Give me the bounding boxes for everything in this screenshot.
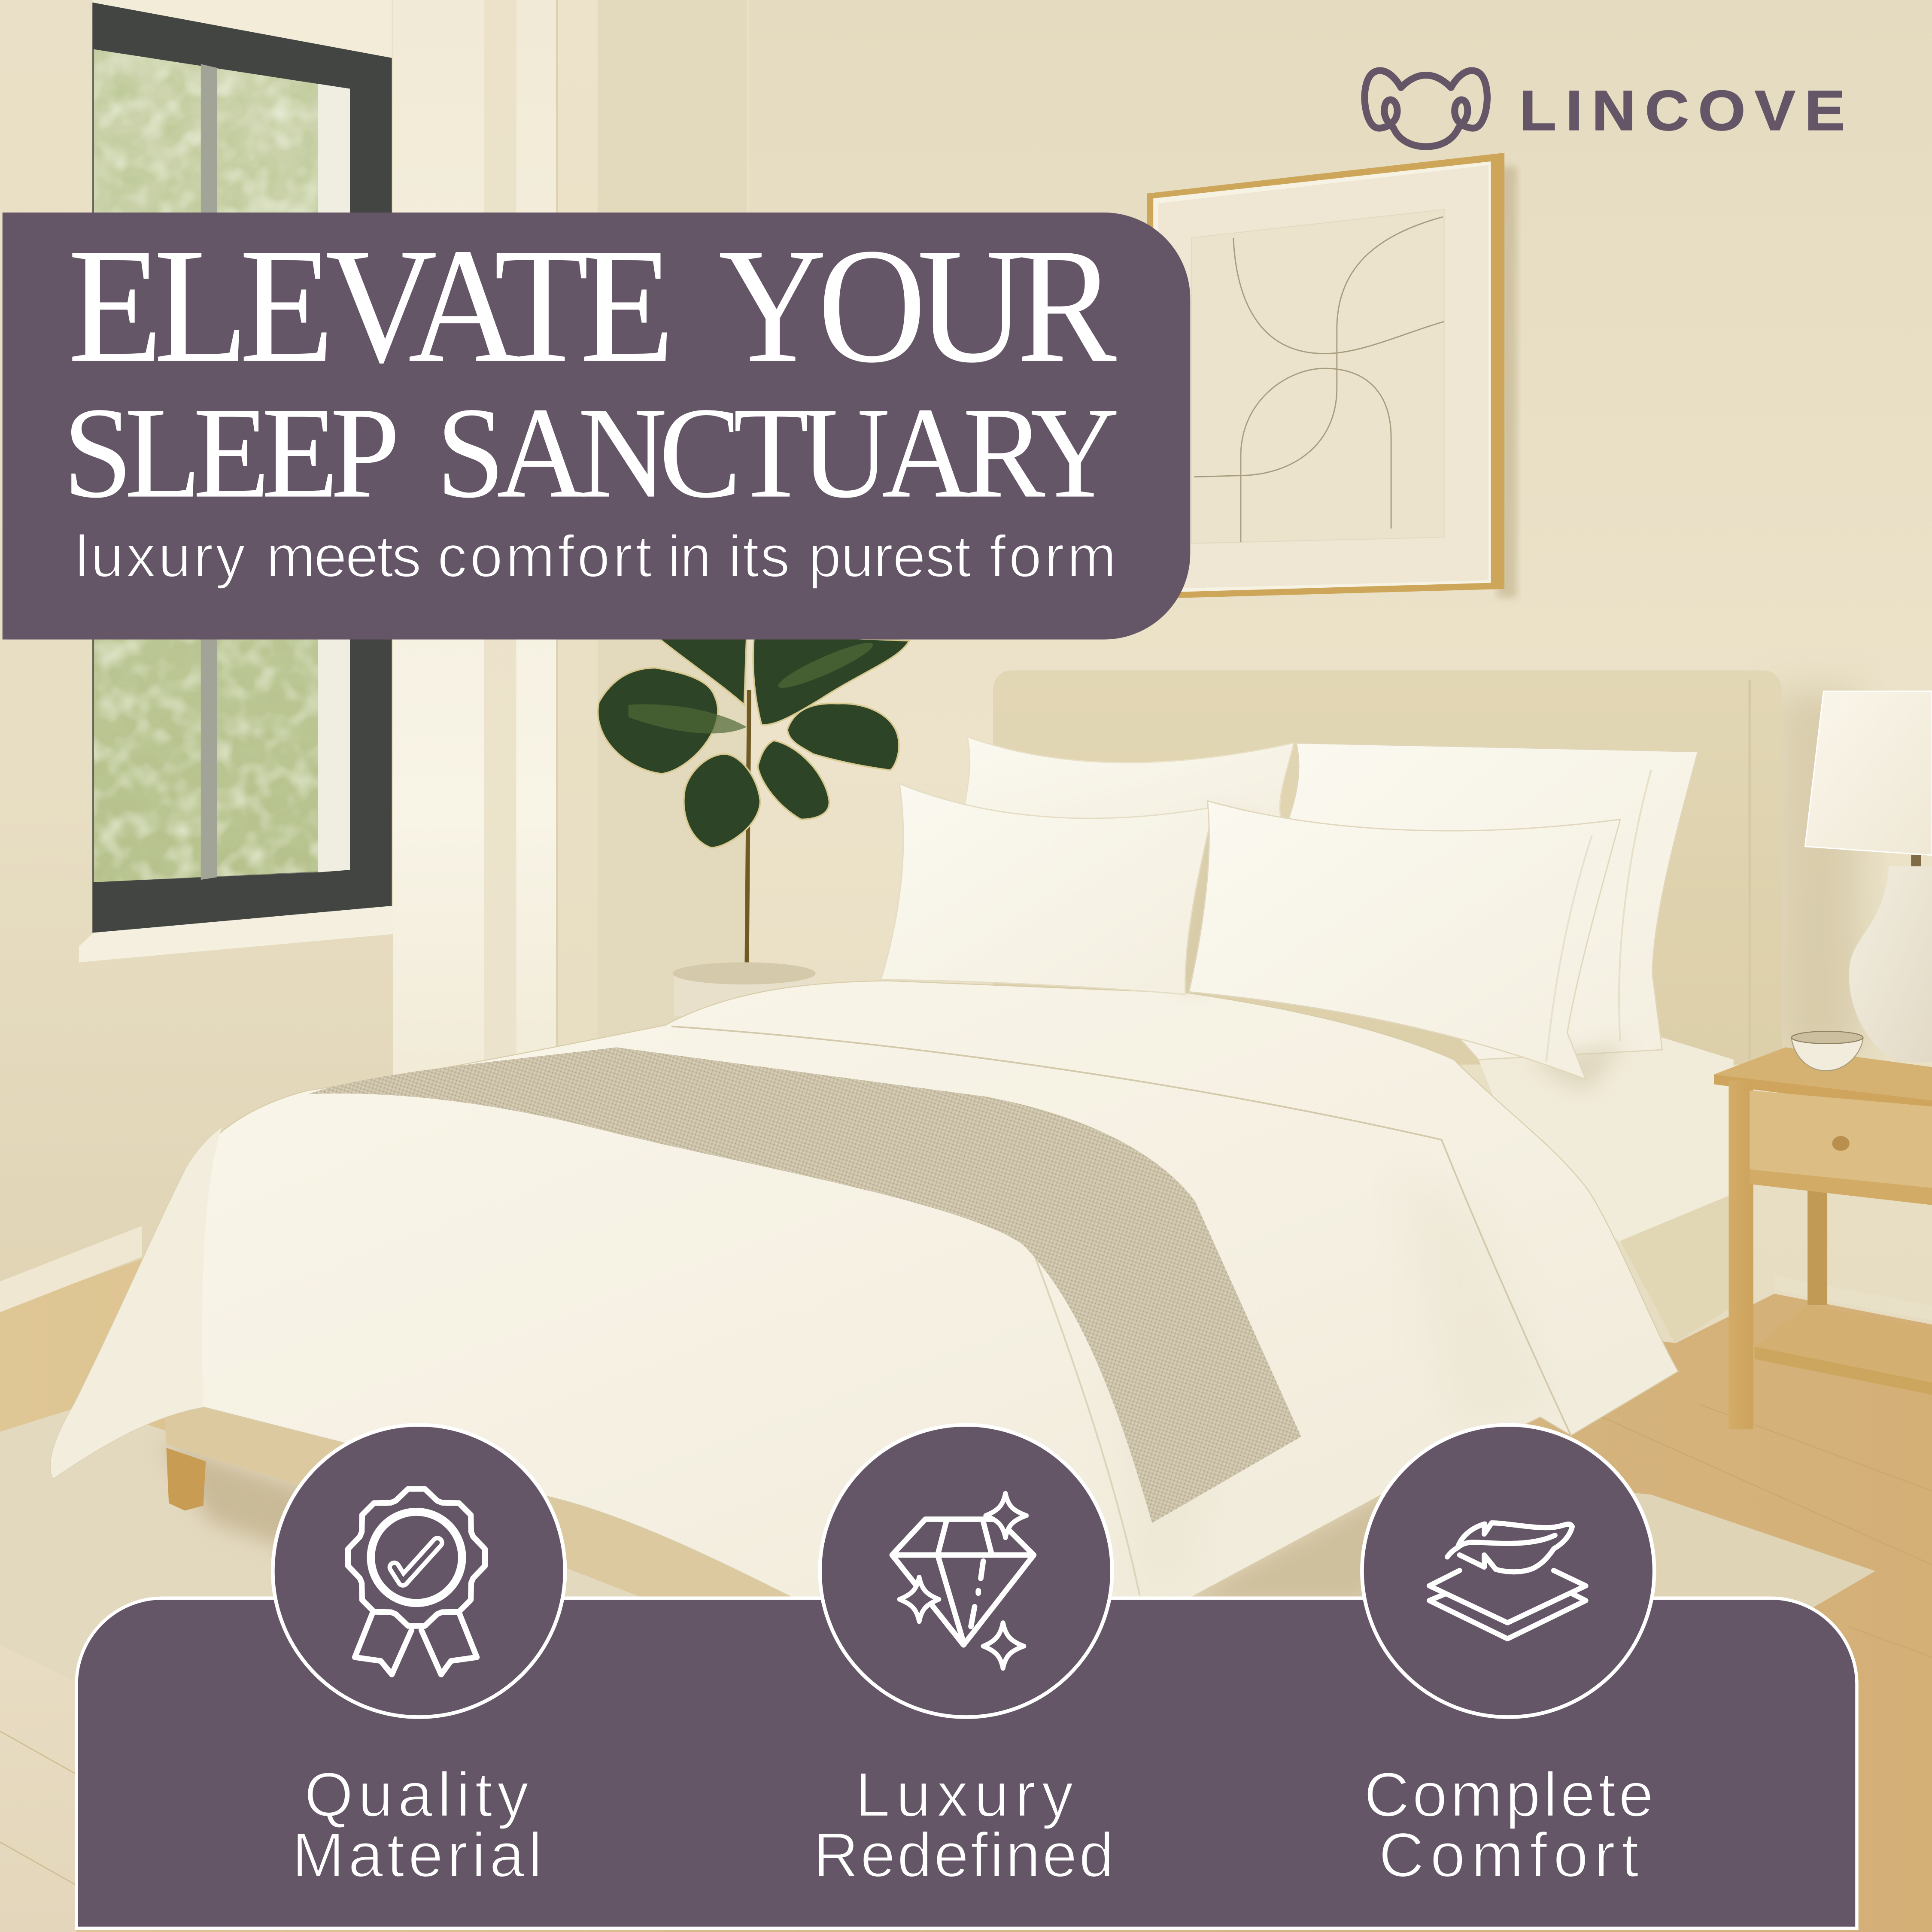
headline line 1: ELEVATE <box>68 214 667 397</box>
window glass <box>86 37 349 893</box>
nightstand <box>1714 1047 1932 1429</box>
fitted sheet <box>1479 1037 1734 1242</box>
pot <box>674 976 816 1017</box>
back leg <box>1807 1190 1827 1305</box>
bed leg <box>166 1448 206 1510</box>
label <box>1364 1760 1653 1890</box>
stem <box>747 690 749 980</box>
label: Complete <box>1364 1760 1653 1830</box>
headline line 1: YOUR <box>718 214 1118 397</box>
label: Quality <box>304 1760 529 1830</box>
duvet <box>51 981 1678 1602</box>
neck <box>1911 855 1921 867</box>
front left pillow <box>881 784 1214 994</box>
leaves <box>598 635 909 848</box>
window mullion <box>201 64 217 880</box>
duvet left corner shade <box>51 1127 222 1479</box>
bowl rim <box>1792 1031 1863 1044</box>
rug <box>0 1405 690 1750</box>
front pillows <box>881 784 1626 1091</box>
panel background <box>3 213 1190 639</box>
drawer <box>1750 1091 1932 1188</box>
plant <box>598 635 909 1017</box>
vase <box>1849 866 1932 1062</box>
headline line 2: SANCTUARY <box>436 380 1117 525</box>
label <box>813 1760 1114 1890</box>
left wall <box>0 0 749 1312</box>
feature: quality material <box>273 1425 565 1890</box>
tagline: meets <box>266 523 422 589</box>
tagline: in <box>668 523 711 589</box>
panel background <box>76 1598 1857 1928</box>
feature: luxury redefined <box>813 1425 1114 1890</box>
tagline: form <box>990 523 1116 589</box>
label: Redefined <box>813 1820 1114 1890</box>
logo <box>1364 70 1854 147</box>
back left pillow <box>961 737 1294 826</box>
shelf edge <box>1755 1347 1932 1395</box>
rail <box>1750 1170 1932 1205</box>
knob <box>1832 1136 1850 1151</box>
badge circle <box>273 1425 565 1717</box>
rug right <box>1109 1466 1875 1645</box>
tagline: luxury <box>75 523 245 589</box>
bed shadow on rug <box>160 1442 407 1589</box>
window white jamb <box>318 84 350 872</box>
label: Luxury <box>855 1760 1073 1830</box>
tagline: comfort <box>437 523 652 589</box>
floor <box>0 1257 1932 1932</box>
mat <box>1158 165 1488 589</box>
feature: complete comfort <box>1362 1425 1654 1890</box>
print <box>1191 210 1444 544</box>
bottom features panel <box>76 1425 1857 1928</box>
mat border <box>1153 161 1491 592</box>
pot soil <box>673 962 816 984</box>
front crease <box>1035 1257 1140 1596</box>
front right pillow <box>1189 801 1620 1079</box>
floor plank lines <box>0 1405 1932 1885</box>
framed wall art <box>1147 153 1517 599</box>
headline panel <box>3 213 1190 639</box>
top edge <box>1714 1075 1932 1113</box>
headline line 1 <box>68 214 1118 397</box>
icon: elephant head <box>1364 70 1487 147</box>
wall recess behind plant <box>592 0 747 1047</box>
baseboard <box>0 1226 142 1312</box>
brand name: LINCOVE <box>1519 79 1854 142</box>
foliage texture <box>86 37 327 893</box>
leaf highlights <box>629 636 876 733</box>
tagline: purest <box>808 523 971 589</box>
bed frame <box>164 1386 838 1602</box>
headline line 2: SLEEP <box>63 380 397 525</box>
front leg <box>1728 1081 1753 1429</box>
window sill <box>79 905 394 962</box>
label: Comfort <box>1379 1820 1639 1890</box>
light floor, bottom left <box>0 1645 76 1932</box>
shelf <box>1755 1305 1932 1382</box>
pillow shadows <box>1177 813 1626 1091</box>
badge circle <box>1362 1425 1654 1717</box>
lamp <box>1805 691 1932 1062</box>
window dark frame <box>92 3 392 933</box>
table top <box>1714 1047 1932 1100</box>
headline line 2 <box>63 380 1117 525</box>
tagline <box>75 523 1116 589</box>
rug shade under duvet <box>1183 1435 1589 1602</box>
bowl <box>1792 1031 1863 1071</box>
turn-down fold line <box>671 1027 1571 1435</box>
headboard <box>993 670 1861 1065</box>
baseboard right <box>1774 1275 1932 1321</box>
wall piece above window <box>92 0 392 59</box>
icon: feather on sheets <box>1429 1523 1586 1639</box>
back wall <box>739 0 1932 1368</box>
knit throw <box>308 1047 1301 1523</box>
shade <box>1805 691 1932 855</box>
duvet soft folds <box>1109 1170 1552 1589</box>
tagline: its <box>728 523 790 589</box>
badge circle <box>820 1425 1112 1717</box>
front right pillow flange <box>1546 835 1592 1062</box>
curtains <box>393 0 598 1091</box>
label: Material <box>292 1820 542 1890</box>
icon: rosette <box>348 1489 485 1674</box>
back right pillow <box>1282 743 1698 1060</box>
icon: diamond <box>892 1493 1034 1668</box>
label <box>292 1760 542 1890</box>
gold frame <box>1147 153 1504 599</box>
art lines <box>1194 217 1444 542</box>
bed base right <box>1620 1195 1730 1343</box>
